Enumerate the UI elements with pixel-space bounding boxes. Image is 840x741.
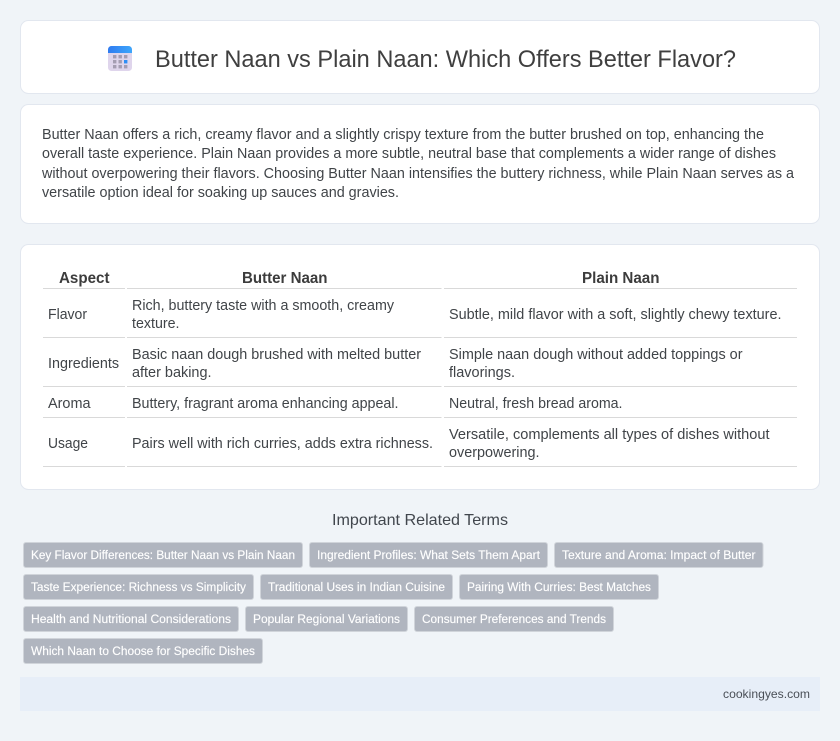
- table row: ingredients: after baking.: [132, 365, 212, 381]
- chip: [260, 574, 452, 600]
- table row: flavor: texture.: [132, 316, 180, 332]
- icon: calendar: [108, 46, 132, 71]
- table row: usage: [48, 427, 770, 461]
- chip: Ingredient Profiles: What Sets Them Apart: [317, 548, 541, 562]
- table row: usage: Usage: [48, 436, 88, 452]
- table row: flavor: Rich, buttery taste with a smooth, creamy: [132, 298, 395, 314]
- chip: [24, 638, 262, 664]
- footer: [20, 677, 820, 711]
- chip: Texture and Aroma: Impact of Butter: [562, 548, 756, 562]
- table row: ingredients: Basic naan dough brushed with melted butter: [132, 347, 421, 363]
- table row: aroma: Buttery, fragrant aroma enhancing appeal.: [132, 396, 398, 412]
- table header row: Plain Naan: [582, 270, 660, 287]
- panel: introduction: [20, 104, 820, 224]
- text block: introduction paragraph: without overpowering their flavors. Choosing Butter Naan intensifies the buttery richness, while Plain Naan serves as a: [41, 166, 794, 182]
- table row: usage: Pairs well with rich curries, adds extra richness.: [132, 436, 433, 452]
- panel: comparison table: [20, 244, 820, 490]
- chip: [24, 606, 238, 632]
- table row: usage: overpowering.: [449, 445, 540, 461]
- table row: aroma: [48, 396, 622, 412]
- chip: [246, 606, 408, 632]
- chip: Taste Experience: Richness vs Simplicity: [31, 580, 247, 594]
- text block: introduction paragraph: Butter Naan offers a rich, creamy flavor and a slightly crispy texture from the butter brushed on top, enhancing the: [42, 127, 764, 143]
- title: Butter Naan vs Plain Naan: Which Offers Better Flavor?: [155, 46, 736, 73]
- chip: [24, 574, 254, 600]
- chip: [460, 574, 658, 600]
- table row: flavor: [48, 298, 782, 332]
- table row: aroma: Aroma: [48, 396, 90, 412]
- heading: important related terms: Important Related Terms: [332, 512, 508, 529]
- chip: Pairing With Curries: Best Matches: [467, 580, 651, 594]
- chip: Health and Nutritional Considerations: [31, 612, 231, 626]
- chip: [414, 606, 614, 632]
- text block: introduction paragraph: [41, 127, 794, 201]
- panel: title header: [20, 20, 820, 94]
- table row: flavor: Flavor: [48, 307, 87, 323]
- chip: Which Naan to Choose for Specific Dishes: [31, 644, 255, 658]
- table row: ingredients: Simple naan dough without added toppings or: [449, 347, 743, 363]
- table header row: [59, 270, 660, 287]
- table row: ingredients: [48, 347, 743, 381]
- text block: introduction paragraph: overall taste experience. Plain Naan provides a more subtle, neutral base that complements a wider range of dishes: [42, 146, 776, 162]
- chip: [310, 542, 548, 568]
- chip: [24, 542, 302, 568]
- text block: introduction paragraph: versatile option ideal for soaking up sauces and gravies.: [42, 185, 399, 201]
- table row: ingredients: Ingredients: [48, 356, 119, 372]
- table row: aroma: Neutral, fresh bread aroma.: [449, 396, 622, 412]
- chip: Traditional Uses in Indian Cuisine: [268, 580, 445, 594]
- chip: Consumer Preferences and Trends: [422, 612, 606, 626]
- table row: flavor: Subtle, mild flavor with a soft, slightly chewy texture.: [449, 307, 782, 323]
- table header row: Butter Naan: [242, 270, 328, 287]
- table row: ingredients: flavorings.: [449, 365, 515, 381]
- table row: usage: Versatile, complements all types of dishes without: [449, 427, 770, 443]
- chip: Key Flavor Differences: Butter Naan vs Plain Naan: [31, 548, 295, 562]
- chip: [554, 542, 763, 568]
- related terms chips: [24, 542, 763, 664]
- footer: cookingyes.com: [723, 687, 810, 701]
- chip: Popular Regional Variations: [253, 612, 400, 626]
- table header row: Aspect: [59, 270, 110, 287]
